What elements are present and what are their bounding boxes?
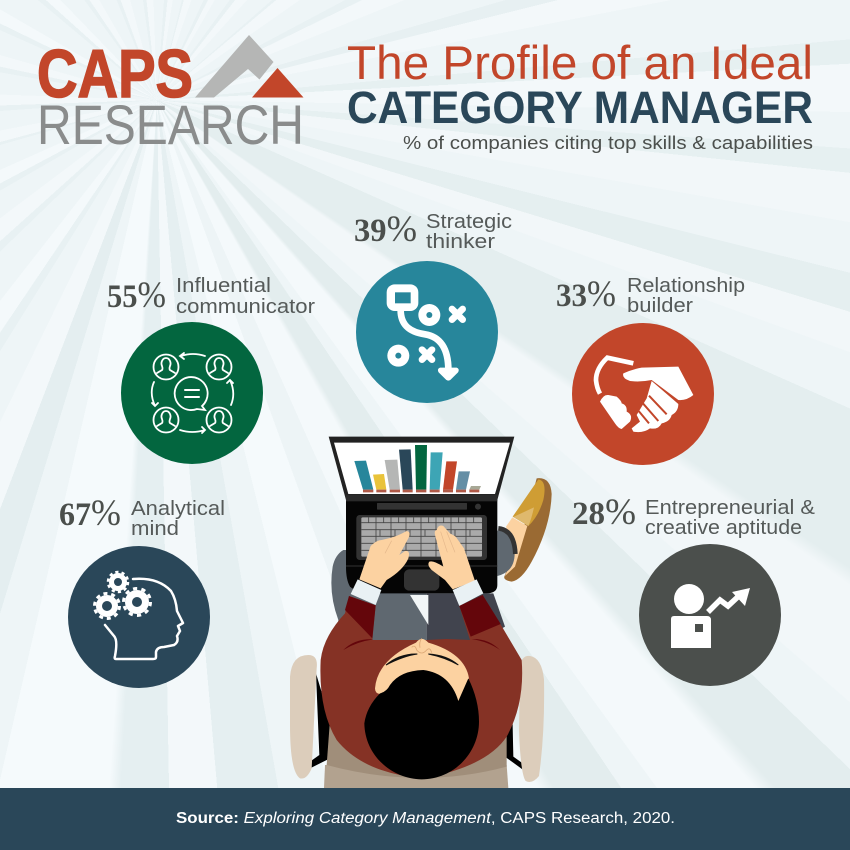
title [347, 36, 813, 153]
stat: 28% entrepreneurial & creative aptitude: creative aptitude [645, 517, 802, 539]
icon: handshake [572, 323, 714, 465]
shirt cuffs [351, 579, 483, 606]
stat: 28% entrepreneurial & creative aptitude: Entrepreneurial & [645, 497, 816, 519]
icon: strategy play diagram [356, 261, 498, 403]
chair [290, 655, 544, 788]
laptop [329, 437, 514, 593]
icon: head with gears [68, 546, 210, 688]
source footer: Source: Exploring Category Management , CAPS Research, 2020. [176, 810, 675, 827]
stat: 39% strategic thinker: thinker [426, 231, 495, 253]
keyboard keys [346, 517, 497, 566]
person at laptop illustration [290, 437, 552, 788]
icon: communication circle [121, 322, 263, 464]
sweater torso [320, 595, 522, 778]
stat: 67% analytical mind: Analytical [131, 498, 225, 520]
stat: 39% strategic thinker: 39% [354, 209, 417, 250]
source footer [0, 788, 850, 850]
stat: 55% influential communicator: 55% [107, 275, 166, 316]
logo: CAPS Research: RESEARCH [37, 93, 304, 156]
stat: 55% influential communicator: Influential [176, 275, 271, 297]
title: The Profile of an Ideal [347, 36, 813, 89]
stat: 55% influential communicator [107, 275, 315, 318]
head and hair [364, 638, 479, 779]
stat: 39% strategic thinker: Strategic [426, 211, 512, 233]
stat: 55% influential communicator: communicator [176, 296, 315, 318]
stat: 33% relationship builder: builder [627, 295, 693, 317]
stat: 39% strategic thinker [354, 209, 512, 253]
stat: 33% relationship builder [556, 274, 745, 317]
logo: CAPS Research: CAPS [37, 36, 193, 112]
title: % of companies citing top skills & capabilities [403, 133, 813, 153]
stat: 33% relationship builder: 33% [556, 274, 616, 315]
stat: 28% entrepreneurial & creative aptitude [572, 492, 816, 539]
hands [359, 525, 475, 589]
logo: CAPS Research [37, 35, 304, 156]
legs [331, 550, 505, 647]
stat: 67% analytical mind: 67% [59, 493, 121, 534]
stat: 67% analytical mind: mind [131, 518, 179, 540]
icon: person with rising arrow [639, 544, 781, 686]
stat: 28% entrepreneurial & creative aptitude: 28% [572, 492, 636, 533]
stat: 67% analytical mind [59, 493, 225, 540]
bar chart on screen [354, 445, 481, 492]
stat: 33% relationship builder: Relationship [627, 275, 745, 297]
title: CATEGORY MANAGER [347, 82, 813, 133]
shoe [497, 478, 552, 582]
